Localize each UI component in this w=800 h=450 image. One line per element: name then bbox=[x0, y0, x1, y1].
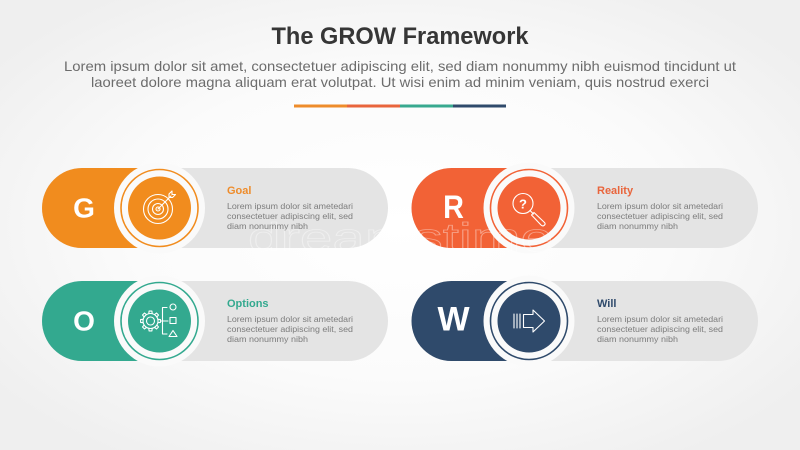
description: Goal bbox=[227, 201, 353, 231]
description: Goal: Lorem ipsum dolor sit ametedari bbox=[227, 201, 353, 211]
icon: gear with branching shapes bbox=[141, 304, 177, 336]
letter O: O bbox=[73, 306, 95, 336]
description: Options: Lorem ipsum dolor sit ametedari bbox=[227, 314, 353, 324]
description: Reality: consectetuer adipiscing elit, sed bbox=[597, 211, 723, 221]
subtitle text: laoreet dolore magna aliquam erat volutpat. Ut wisi enim ad minim veniam, quis nostrud exerci bbox=[91, 74, 709, 90]
heading: Will: Will bbox=[597, 298, 616, 310]
subtitle text: Lorem ipsum dolor sit amet, consectetuer adipiscing elit, sed diam nonummy nibh euismod tincidunt ut bbox=[64, 58, 736, 74]
description: Options: diam nonummy nibh bbox=[227, 334, 308, 344]
description: Will: diam nonummy nibh bbox=[597, 334, 678, 344]
letter G: G bbox=[73, 192, 95, 224]
heading: Reality: Reality bbox=[597, 185, 634, 197]
description: Will bbox=[597, 314, 723, 344]
icon: arrow with speed lines bbox=[514, 310, 544, 332]
letter W: W bbox=[437, 300, 470, 338]
heading: Options: Options bbox=[227, 298, 269, 310]
description: Goal: diam nonummy nibh bbox=[227, 221, 308, 231]
heading: Goal: Goal bbox=[227, 185, 251, 197]
title: The GROW Framework bbox=[272, 23, 529, 50]
panel: options bbox=[42, 276, 388, 366]
description: Goal: consectetuer adipiscing elit, sed bbox=[227, 211, 353, 221]
watermark: dreamstime bbox=[248, 216, 553, 260]
description: Options: consectetuer adipiscing elit, sed bbox=[227, 324, 353, 334]
subtitle text bbox=[64, 58, 736, 90]
icon: magnifier with question mark: ? bbox=[519, 196, 527, 212]
description: Reality: diam nonummy nibh bbox=[597, 221, 678, 231]
description: Will: consectetuer adipiscing elit, sed bbox=[597, 324, 723, 334]
panel: will bbox=[412, 276, 758, 366]
icon: magnifier with question mark bbox=[513, 194, 545, 226]
description: Options bbox=[227, 314, 353, 344]
description: Reality bbox=[597, 201, 723, 231]
panel: goal bbox=[42, 162, 388, 254]
icon: target with arrow bbox=[144, 191, 176, 224]
panel: reality bbox=[412, 162, 758, 254]
title underline in four colours bbox=[294, 104, 506, 108]
description: Will: Lorem ipsum dolor sit ametedari bbox=[597, 314, 723, 324]
letter R: R bbox=[443, 190, 464, 225]
description: Reality: Lorem ipsum dolor sit ametedari bbox=[597, 201, 723, 211]
